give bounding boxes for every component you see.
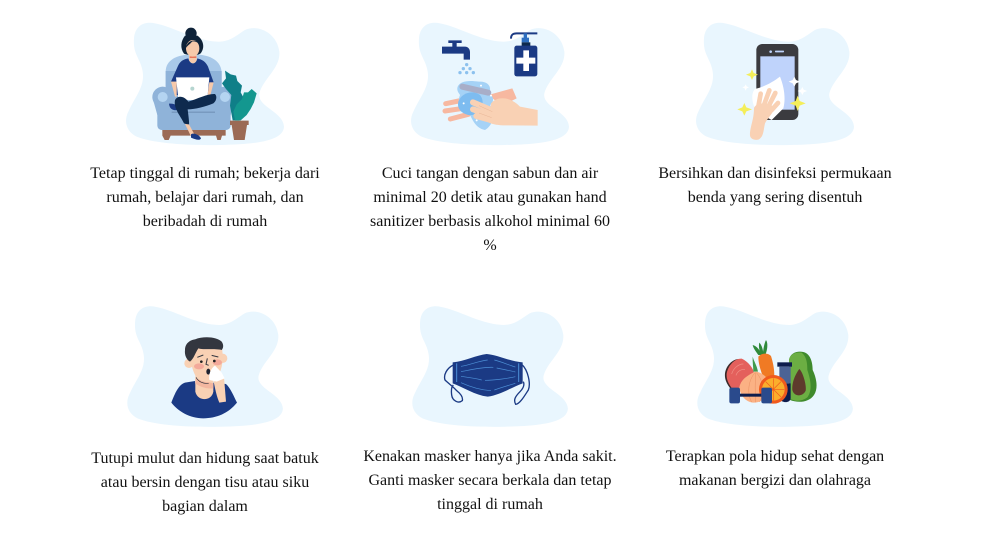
shoulders: [171, 381, 237, 418]
caption: Tutupi mulut dan hidung saat batuk: [91, 450, 319, 467]
bottle: [777, 362, 792, 367]
sanitizer bottle: [511, 33, 537, 39]
caption: [370, 165, 610, 254]
caption: sanitizer berbasis alkohol minimal 60: [370, 213, 610, 230]
plant: [222, 71, 244, 120]
illustration: man coughing into tissue: [127, 306, 283, 427]
illustration: woman with laptop in armchair: [126, 22, 284, 145]
hair back: [181, 36, 203, 55]
laptop: [176, 77, 209, 100]
face details: [196, 355, 218, 383]
caption: Terapkan pola hidup sehat dengan: [666, 448, 884, 465]
neck: [195, 375, 213, 399]
caption: %: [483, 237, 497, 254]
caption: [363, 448, 617, 513]
caption: Cuci tangan dengan sabun dan air: [382, 165, 598, 182]
tap: [442, 40, 470, 60]
caption: rumah, belajar dari rumah, dan: [106, 189, 304, 206]
caption: tinggal di rumah: [437, 496, 543, 513]
soap foam: [457, 81, 493, 130]
hair: [185, 337, 223, 362]
illustration: tap, sanitizer and washing hands: [411, 22, 569, 145]
mask body: [453, 354, 523, 397]
legs: [169, 104, 178, 110]
caption: beribadah di rumah: [143, 213, 267, 230]
avocado: [789, 352, 817, 402]
dumbbell: [740, 394, 761, 397]
salmon: [725, 359, 740, 390]
caption: minimal 20 detik atau gunakan hand: [373, 189, 607, 206]
illustration: face mask: [412, 306, 568, 427]
caption: bagian dalam: [162, 498, 248, 515]
hand: [758, 90, 778, 110]
orange: [759, 375, 788, 404]
panel: disinfect surfaces: [658, 22, 892, 206]
carrot: [753, 340, 767, 355]
pleats: [457, 363, 519, 382]
caption: Kenakan masker hanya jika Anda sakit.: [363, 448, 617, 465]
panel: wear mask: [363, 306, 617, 513]
caption: Tetap tinggal di rumah; bekerja dari: [90, 165, 320, 182]
caption: Ganti masker secara berkala dan tetap: [368, 472, 611, 489]
head: [186, 40, 199, 57]
caption: [666, 448, 884, 489]
caption: [91, 450, 319, 515]
caption: [90, 165, 320, 230]
panel: healthy lifestyle: [666, 306, 884, 489]
droplets: [458, 63, 475, 74]
panel: stay at home: [90, 22, 320, 230]
torso and arms: [171, 58, 214, 95]
caption: Bersihkan dan disinfeksi permukaan: [658, 165, 892, 182]
caption: [658, 165, 892, 206]
caption: atau bersin dengan tisu atau siku: [101, 474, 309, 491]
tissue and hand: [214, 377, 226, 403]
onion: [753, 357, 758, 372]
ears and face: [184, 359, 194, 368]
panel: wash hands: [370, 22, 610, 254]
caption: makanan bergizi dan olahraga: [679, 472, 871, 489]
illustration: wiping a smartphone: [696, 22, 854, 145]
panel: cover cough: [91, 306, 319, 515]
front hand: [473, 102, 497, 122]
caption: benda yang sering disentuh: [688, 189, 862, 206]
sparkles on foam: [463, 85, 492, 121]
cloth: [752, 77, 785, 120]
illustration: healthy food and dumbbell: [697, 306, 853, 427]
back hand: [445, 100, 468, 119]
ear loops: [445, 365, 529, 404]
sparkles: [737, 69, 806, 116]
